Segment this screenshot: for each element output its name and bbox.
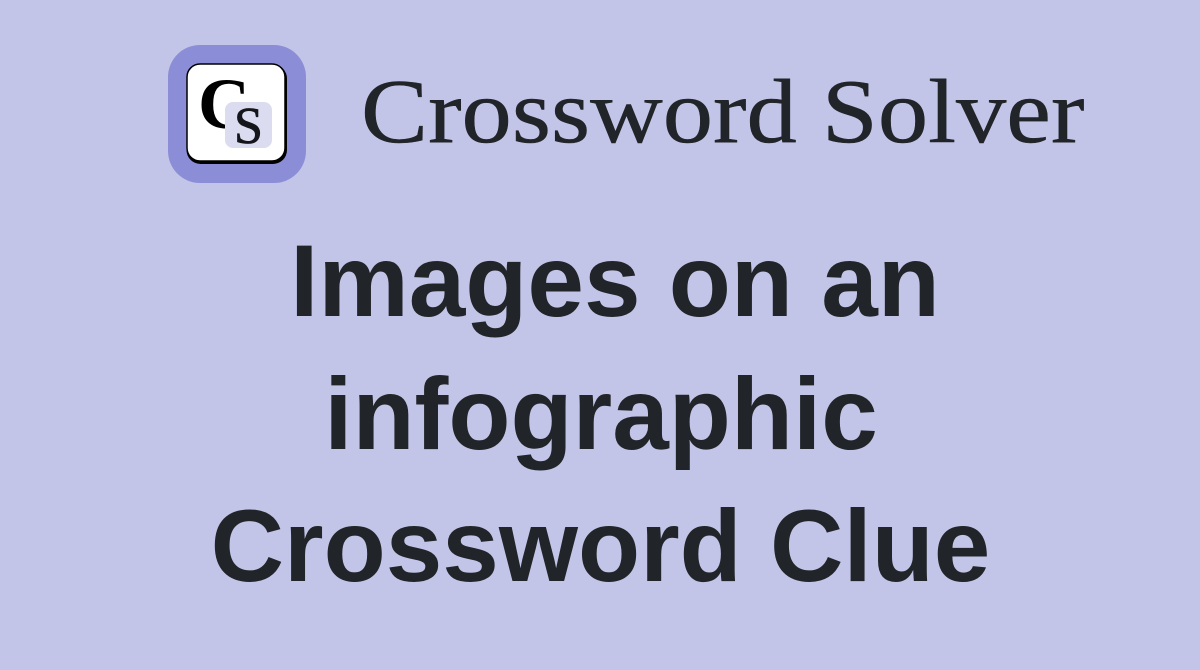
logo icon: C xyxy=(198,64,250,144)
title line 2: infographic xyxy=(324,357,878,471)
logo icon: S xyxy=(234,98,263,155)
logo icon xyxy=(168,45,306,183)
brand name: Crossword Solver xyxy=(360,61,1084,162)
title line 1: Images on an xyxy=(290,224,940,338)
title line 3: Crossword Clue xyxy=(211,489,990,603)
